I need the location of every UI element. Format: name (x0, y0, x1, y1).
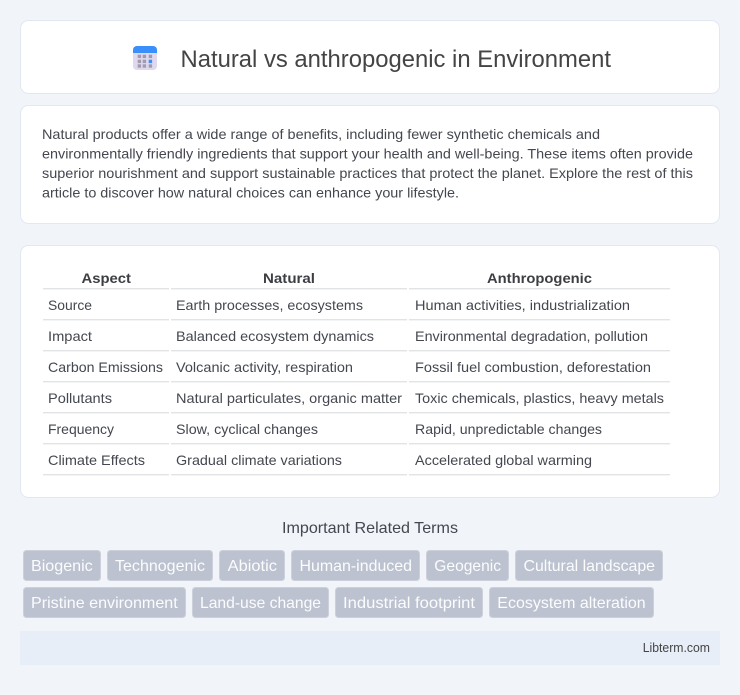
table row: impact: Environmental degradation, pollution (415, 328, 648, 344)
table row: climate effects: Gradual climate variations (176, 452, 342, 468)
table row: impact: Impact (48, 328, 92, 344)
table row: frequency: Rapid, unpredictable changes (415, 421, 602, 437)
tag group: related terms: Industrial footprint (343, 595, 476, 612)
table row: frequency (48, 421, 602, 437)
table row: pollutants: Toxic chemicals, plastics, heavy metals (415, 390, 664, 406)
table row: carbon emissions: Carbon Emissions (48, 359, 163, 375)
text block: introduction paragraph (42, 126, 693, 200)
text block: introduction paragraph: superior nourishment and support sustainable practices that protect the planet. Explore the rest of this (42, 165, 693, 181)
table row: impact: Balanced ecosystem dynamics (176, 328, 374, 344)
heading: important related terms: Important Related Terms (282, 520, 458, 537)
tag group: related terms: Cultural landscape (524, 558, 655, 575)
table header row: Aspect (82, 270, 131, 286)
table row: pollutants: Natural particulates, organic matter (176, 390, 402, 406)
table row: carbon emissions: Fossil fuel combustion, deforestation (415, 359, 651, 375)
tag group: related terms: Pristine environment (31, 595, 178, 612)
tag group: related terms: Abiotic (228, 558, 277, 575)
title: Natural vs anthropogenic in Environment (180, 46, 611, 73)
table row: climate effects: Climate Effects (48, 452, 145, 468)
table row: impact (48, 328, 648, 344)
panel: introduction (20, 106, 720, 224)
table row: climate effects: Accelerated global warming (415, 452, 592, 468)
tag group: related terms: Land-use change (200, 595, 321, 612)
footer (20, 631, 720, 665)
table row: source: Earth processes, ecosystems (176, 297, 363, 313)
panel: title header (20, 20, 720, 94)
table header row: Anthropogenic (487, 270, 592, 286)
tag group: related terms: Technogenic (115, 558, 205, 575)
panel: comparison table (20, 246, 720, 498)
text block: introduction paragraph: article to discover how natural choices can enhance your lifestyle. (42, 184, 459, 200)
table row: frequency: Frequency (48, 421, 114, 437)
tag group: related terms: Ecosystem alteration (497, 595, 646, 612)
table row: climate effects (48, 452, 592, 468)
text block: introduction paragraph: environmentally friendly ingredients that support your health and well-being. These items often provide (42, 146, 693, 162)
table row: source: Human activities, industrialization (415, 297, 630, 313)
text block: introduction paragraph: Natural products offer a wide range of benefits, including fewer synthetic chemicals and (42, 126, 600, 142)
table header row (82, 270, 592, 286)
tag group: related terms (24, 550, 662, 618)
table row: carbon emissions: Volcanic activity, respiration (176, 359, 353, 375)
table row: pollutants: Pollutants (48, 390, 112, 406)
table row: carbon emissions (48, 359, 651, 375)
icon: calendar (133, 46, 157, 70)
tag group: related terms: Geogenic (434, 558, 501, 575)
footer: Libterm.com (643, 641, 710, 655)
table row: frequency: Slow, cyclical changes (176, 421, 318, 437)
table row: source: Source (48, 297, 92, 313)
table row: pollutants (48, 390, 664, 406)
table header row: Natural (263, 270, 315, 286)
tag group: related terms: Human-induced (300, 558, 412, 575)
table row: source (48, 297, 630, 313)
tag group: related terms: Biogenic (31, 558, 93, 575)
